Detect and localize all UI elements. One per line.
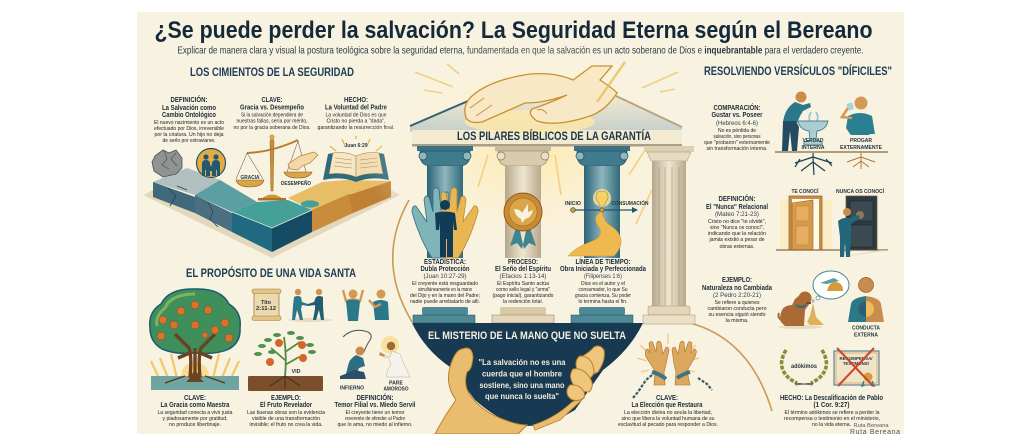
pillar 3 blue (571, 146, 633, 323)
text block: estadística (410, 257, 480, 305)
heading: pilares: LOS PILARES BÍBLICOS DE LA GARANTÍA (457, 130, 651, 143)
icon: cracked rock (152, 150, 182, 177)
text block: hecho voluntad (318, 95, 394, 131)
text block: naturaleza: (2 Pedro 2:20-21) (713, 292, 761, 299)
text block: nunca relacional: (Mateo 7:21-23) (715, 211, 759, 218)
text block: proceso: como sello legal y "arma" (496, 287, 550, 293)
label: juan 6:29: Juan 6:29 (344, 143, 368, 149)
text block: proceso: (Efacios 1:13-14) (500, 273, 546, 280)
teal centre slab (232, 200, 312, 228)
label: progar externamente (840, 138, 882, 151)
text block: descalificación (780, 393, 883, 428)
text block: naturaleza (702, 275, 773, 324)
icon: dog and thought bubble (778, 271, 849, 329)
text block: descalificación: no la vida eterna. (812, 422, 851, 428)
text block: proceso (492, 257, 554, 305)
quote: sostiene, sino una mano (480, 380, 564, 390)
text block: clave gracia maestra: y piadosamente por gratitud, (162, 416, 228, 422)
text block: definición salvación: de serlo por extraviarse. (162, 138, 216, 144)
text block: clave gracia: no por la gracia soberana de Dios. (234, 125, 310, 131)
icon: crossed certificate (834, 348, 879, 386)
icon: circle with two people (196, 148, 226, 178)
icon: crossed certificate: RECOMPENSA/ (840, 356, 873, 361)
second slab (195, 180, 257, 212)
text block: nunca relacional: Cristo no dice "te olvidé", (708, 219, 766, 225)
gold slab (288, 180, 391, 210)
text block: clave elección: CLAVE: (656, 393, 678, 402)
text block: estadística: Dubla Protección (420, 264, 470, 273)
label: vid: VID (292, 369, 301, 375)
text block: definición salvación: por la criatura. Un hijo no deja (154, 132, 224, 138)
pediment and cornice (410, 96, 682, 146)
text block: proceso: El Espíritu Santo actúa (497, 281, 549, 287)
text block: definición salvación: El nuevo nacimiento es un acto (154, 120, 224, 126)
panel: misterio de la mano (412, 323, 643, 434)
text block: clave gracia (234, 95, 310, 131)
icon: handshake people (288, 289, 332, 322)
text block: ejemplo fruto: El Fruto Revelador (260, 400, 312, 409)
panel: los cimientos de la seguridad (143, 65, 400, 258)
icon: closed dark door with figure (834, 187, 892, 258)
text block: línea de tiempo: Dios es el autor y el (581, 281, 625, 287)
title: ¿Se puede perder la salvación? La Seguridad Eterna según el Bereano (154, 17, 872, 44)
grey slab (153, 168, 220, 195)
icon: laurel adókimos (782, 350, 826, 385)
text block: proceso: (pago inicial), garantizando (492, 293, 554, 299)
pillar 4 stone (643, 146, 695, 324)
watermark (850, 423, 900, 434)
text block: nunca relacional: El "Nunca" Relacional (706, 202, 768, 211)
panel: pilares bíblicos temple (360, 35, 772, 411)
text block: definición salvación (154, 95, 224, 144)
text block: hecho voluntad: La voluntad de Dios es que (326, 112, 386, 118)
text block: definición temor: reverente de ofender al Padre (345, 416, 405, 422)
text block: hecho voluntad: La Voluntad del Padre (325, 102, 387, 112)
text block: nunca relacional: jamás existió a pesar de (709, 237, 764, 243)
text block: descalificación: (1 Cor. 9:27) (814, 400, 850, 409)
label: nunca os conocí: NUNCA OS CONOCÍ (836, 187, 884, 195)
quote: que nunca lo suelta" (485, 391, 559, 401)
text block: definición temor: que lo ama, no miedo al infierno. (338, 422, 412, 428)
panel: el propósito de una vida santa (150, 265, 416, 428)
text block: clave gracia maestra: La seguridad conecta a vivir justa (158, 410, 232, 416)
icon: fruit plant (248, 331, 323, 391)
text block: comparación: salvación, sino personas (714, 134, 761, 140)
text block: definición salvación: Cambio Ontológico (162, 110, 216, 119)
decorative glow and rays (360, 35, 700, 265)
label: padre amoroso: PARE (389, 380, 403, 386)
text block: línea de tiempo: LÍNEA DE TIEMPO: (576, 257, 630, 266)
label: adókimos: adókimos (791, 364, 818, 370)
text block: naturaleza: la misma. (726, 318, 748, 324)
icon: praying christ (379, 336, 410, 392)
text block: naturaleza: EJEMPLO: (722, 275, 752, 284)
icon: figure drinking externally (840, 96, 882, 169)
text block: naturaleza: su esencia siguió siendo (708, 312, 766, 318)
label: infierno: INFIERNO (340, 386, 364, 392)
text block: clave gracia maestra (158, 393, 232, 428)
label: conducta externa: EXTERNA (854, 332, 878, 338)
text block: comparación: COMPARACIÓN: (714, 103, 760, 112)
label: verdad interna: INTERNA (802, 145, 825, 151)
icon: praising people (343, 290, 389, 321)
text block: clave gracia maestra: CLAVE: (184, 393, 206, 402)
heading: cimientos: LOS CIMIENTOS DE LA SEGURIDAD (190, 65, 354, 79)
text block: línea de tiempo: (Filipenses 1:6) (584, 273, 622, 280)
label: progar externamente: PROGAR (850, 138, 872, 144)
label: conducta externa (852, 326, 880, 338)
text block: ejemplo fruto (247, 393, 325, 428)
text block: nunca relacional: obras externas. (720, 244, 754, 250)
text block: ejemplo fruto: visible de una transformación (252, 416, 320, 422)
text block: línea de tiempo (560, 257, 647, 305)
text block: descalificación: El término adókimos se refiere a perder la (784, 410, 880, 416)
text block: ejemplo fruto: EJEMPLO: (271, 393, 301, 402)
text block: clave elección: La Elección que Restaura (632, 400, 703, 409)
text block: definición salvación: La Salvación como (162, 103, 216, 112)
text block: nunca relacional (706, 194, 768, 250)
text block: ejemplo fruto: invisible; el fruto no crea la vida. (250, 422, 322, 428)
dark bowl (412, 323, 643, 426)
icon: external conduct figure (848, 278, 884, 338)
text block: clave gracia: Si la salvación dependiera de (241, 112, 303, 118)
text block: línea de tiempo: consumador, lo que Su (578, 287, 628, 293)
text block: estadística: simultáneamente en la mano (418, 287, 472, 293)
icon: fountain figure and roots (775, 92, 888, 175)
icon: scroll tito (252, 289, 281, 320)
text block: comparación: (Hebreos 6:4-6) (716, 120, 758, 127)
icon: scales (236, 134, 318, 200)
icon: divine hand from above (465, 62, 625, 123)
label: desempeño: DESEMPEÑO (281, 180, 311, 187)
page background panel (137, 12, 904, 434)
text block: estadística: ESTADÍSTICA: (424, 257, 466, 266)
quote (478, 357, 566, 401)
text block: clave gracia: nuestras fallas, sería por mérito, (236, 118, 308, 124)
label: te conocí: TE CONOCÍ (792, 187, 819, 195)
text block: estadística: nadie puede arrebatarlo de allí. (410, 299, 480, 305)
text block: ejemplo fruto: Las buenas obras son la evidencia (247, 410, 325, 416)
text block: comparación: No es pérdida de (718, 128, 756, 134)
text block: descalificación: recompensa o testimonio en el ministerio, (784, 416, 880, 422)
text block: proceso: la redención total. (503, 299, 543, 305)
text block: clave gracia: Gracia vs. Desempeño (240, 102, 304, 112)
text block: estadística: del Dijo y en la mano del Padre; (410, 293, 480, 299)
text block: línea de tiempo: Obra Iniciada y Perfeccionada (560, 264, 647, 273)
icon: hands breaking chains (632, 334, 712, 399)
text block: estadística: (Juan 10:27-29) (424, 273, 466, 280)
text block: definición temor: DEFINICIÓN: (356, 393, 394, 402)
text block: definición temor: Temor Filial vs. Miedo Servil (334, 400, 416, 409)
text block: comparación: sin transformación interna. (706, 146, 768, 152)
text block: clave gracia: CLAVE: (262, 95, 282, 104)
text block: clave gracia maestra: La Gracia como Maestra (160, 400, 230, 409)
icon: double protection hands (412, 188, 478, 258)
text block: clave elección (618, 393, 718, 428)
icon: timeline with road and bulb (565, 189, 649, 256)
text block: estadística: El creyente está resguardado (412, 281, 478, 287)
label: consumación: CONSUMACIÓN (612, 199, 649, 207)
text block: naturaleza: cambiaron conducta pero (708, 306, 766, 312)
text block: comparación (704, 103, 770, 152)
icon: grace tree (150, 289, 240, 390)
text block: línea de tiempo: lo termina hasta el fin. (578, 299, 628, 305)
quote: "La salvación no es una (478, 357, 566, 367)
text block: línea de tiempo: gracia comienza, Su poder (575, 293, 631, 299)
text block: clave elección: La elección divina no anula la libertad, (624, 410, 712, 416)
icon: scroll tito: 2:11-12 (256, 306, 276, 312)
text block: nunca relacional: indicando que la relación (708, 231, 766, 237)
text block: naturaleza: Se refiere a quienes (714, 300, 760, 306)
pillar 2 stone (492, 146, 554, 323)
pillar 1 blue (413, 146, 475, 323)
text block: hecho voluntad: HECHO: (344, 95, 368, 104)
text block: comparación: Gustar vs. Poseer (712, 110, 763, 119)
icon: crossed certificate: TESTIMONIO (843, 361, 869, 366)
icon: scroll tito: Tito (261, 300, 272, 306)
text block: definición salvación: DEFINICIÓN: (170, 95, 208, 104)
text block: clave gracia maestra: no produce libertinaje. (169, 422, 221, 428)
text block: nunca relacional: sino "Nunca os conocí", (710, 225, 764, 231)
decorative arcs (393, 200, 772, 411)
label: padre amoroso: AMOROSO (384, 386, 408, 392)
quote: cuerda que el hombre (482, 368, 562, 378)
text block: descalificación: HECHO: La Descalificación de Pablo (780, 393, 883, 402)
subtitle: Explicar de manera clara y visual la postura teológica sobre la seguridad eterna, fundamentada en que la salvación es un acto soberano de Dios e inquebrantable para el verdadero creyente. (178, 46, 864, 56)
fingers (567, 346, 604, 400)
icon: supporting hand (435, 346, 604, 434)
text block: proceso: PROCESO: (508, 257, 538, 266)
label: verdad interna: VERDAD (802, 138, 824, 144)
text block: hecho voluntad: garantizando la resurrección final. (318, 125, 394, 131)
text block: clave elección: sino que libera la voluntad humana de su (622, 416, 714, 422)
text block: nunca relacional: DEFINICIÓN: (718, 194, 756, 203)
text block: clave elección: esclavitud al pecado para responder a Dios. (618, 422, 718, 428)
text block: naturaleza: Naturaleza no Cambiada (702, 283, 773, 292)
icon: open door (776, 187, 888, 250)
text block: proceso: El Seño del Espíritu (495, 264, 551, 273)
label: verdad interna (802, 138, 825, 151)
label: gracia: GRACIA (240, 175, 260, 181)
text block: definición temor (334, 393, 416, 428)
panel: resolviendo versículos difíciles (702, 63, 892, 428)
icon: open bible with rays (323, 136, 389, 182)
label: padre amoroso (384, 380, 408, 392)
heading: misterio: EL MISTERIO DE LA MANO QUE NO SUELTA (428, 330, 626, 342)
icon: isometric puzzle foundation (143, 168, 400, 258)
watermark: Ruta Bereana (854, 423, 889, 429)
label: conducta externa: CONDUCTA (852, 326, 880, 332)
text block: definición temor: El creyente tiene un temor (346, 410, 405, 416)
label: inicio: INICIO (565, 201, 581, 207)
text block: definición salvación: efectuado por Dios, irreversible (154, 126, 224, 132)
text block: hecho voluntad: Cristo no pierda a "dada", (326, 118, 386, 124)
heading: versículos: RESOLVIENDO VERSÍCULOS "DÍFICILES" (704, 63, 892, 78)
label: progar externamente: EXTERNAMENTE (840, 145, 882, 151)
icon: kneeling man fearing whip (340, 330, 371, 392)
heading: propósito: EL PROPÓSITO DE UNA VIDA SANTA (186, 265, 356, 280)
icon: spirit seal (504, 193, 542, 249)
text block: comparación: que "probaron" externamente (704, 140, 770, 146)
